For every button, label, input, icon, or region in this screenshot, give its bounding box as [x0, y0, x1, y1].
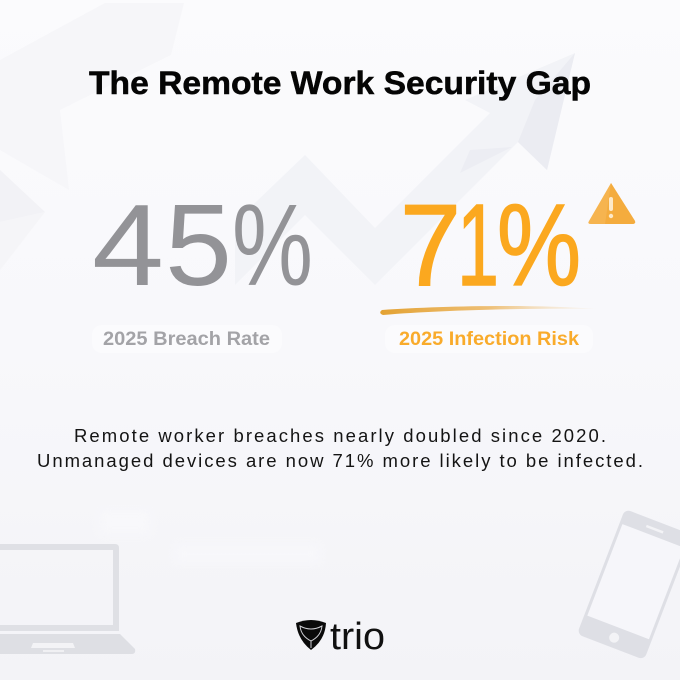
icon: warning triangle: [588, 183, 635, 224]
blurred background residue: [100, 510, 320, 563]
logo mark: shield: [296, 620, 326, 650]
number: 45%: [92, 180, 313, 310]
number: 45%: 5: [165, 180, 232, 310]
icon: smartphone: [577, 509, 680, 660]
label: 2025 infection risk: 2025 Infection Risk: [399, 329, 579, 350]
background: low-poly shapes: [0, 3, 184, 270]
stat: 45% breach rate: [92, 180, 313, 353]
number: 45%: %: [232, 180, 313, 310]
number: 71%: [400, 180, 581, 310]
logo: trio: [296, 616, 385, 658]
number: 71%: %: [497, 180, 581, 310]
number: 45%: 4: [92, 180, 164, 310]
label: 2025 infection risk: [385, 325, 593, 353]
description text: Remote worker breaches nearly doubled since 2020.: [74, 425, 606, 446]
description text: Unmanaged devices are now 71% more likely to be infected.: [37, 450, 643, 471]
underline swoosh: [380, 306, 597, 315]
number: 71%: 7: [400, 180, 461, 310]
icon: laptop: [0, 544, 135, 654]
number: 71%: 1: [457, 180, 499, 310]
label: 2025 breach rate: [92, 325, 282, 353]
logo wordmark: trio: [330, 616, 385, 658]
description text: [37, 425, 643, 471]
background: rising arrow: [235, 53, 575, 285]
stat: 71% infection risk: [380, 180, 597, 353]
title: The Remote Work Security Gap: [89, 65, 591, 101]
label: 2025 breach rate: 2025 Breach Rate: [103, 329, 270, 350]
